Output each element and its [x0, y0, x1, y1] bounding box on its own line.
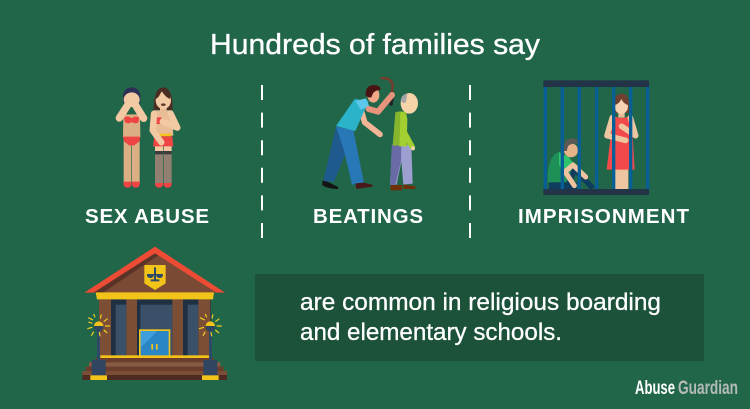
label: sex abuse: SEX ABUSE	[85, 205, 209, 228]
left lamp	[87, 314, 110, 380]
panel: statement	[255, 274, 704, 361]
icon: two women covering themselves	[119, 87, 177, 188]
title: Hundreds of families say	[210, 29, 541, 61]
label: beatings: BEATINGS	[313, 205, 423, 228]
elderly man	[390, 144, 413, 185]
lintel	[96, 292, 214, 299]
right woman	[153, 87, 173, 110]
icon: man beating elderly man with belt	[322, 78, 418, 190]
icon: two people behind cage bars	[543, 80, 649, 195]
logo: Abuse Guardian: Abuse	[635, 378, 675, 399]
roof	[84, 247, 225, 293]
steps	[100, 355, 209, 358]
seated boy	[548, 152, 575, 182]
emblem	[144, 265, 166, 290]
door	[139, 329, 170, 357]
icon: school building	[82, 247, 227, 380]
head	[367, 87, 379, 103]
standing woman	[615, 168, 621, 189]
raised arm	[369, 95, 392, 112]
attacker legs	[323, 127, 353, 182]
label: imprisonment: IMPRISONMENT	[518, 205, 689, 228]
statement text: are common in religious boarding	[300, 289, 661, 316]
left woman	[123, 87, 140, 103]
logo: Abuse Guardian	[635, 378, 738, 399]
cage bars	[544, 86, 649, 190]
attacker torso	[336, 99, 369, 131]
belt	[381, 78, 393, 95]
far arm	[361, 108, 380, 134]
walls	[99, 299, 211, 357]
right lamp	[199, 314, 222, 380]
statement text: and elementary schools.	[300, 319, 562, 346]
columns	[99, 299, 111, 357]
